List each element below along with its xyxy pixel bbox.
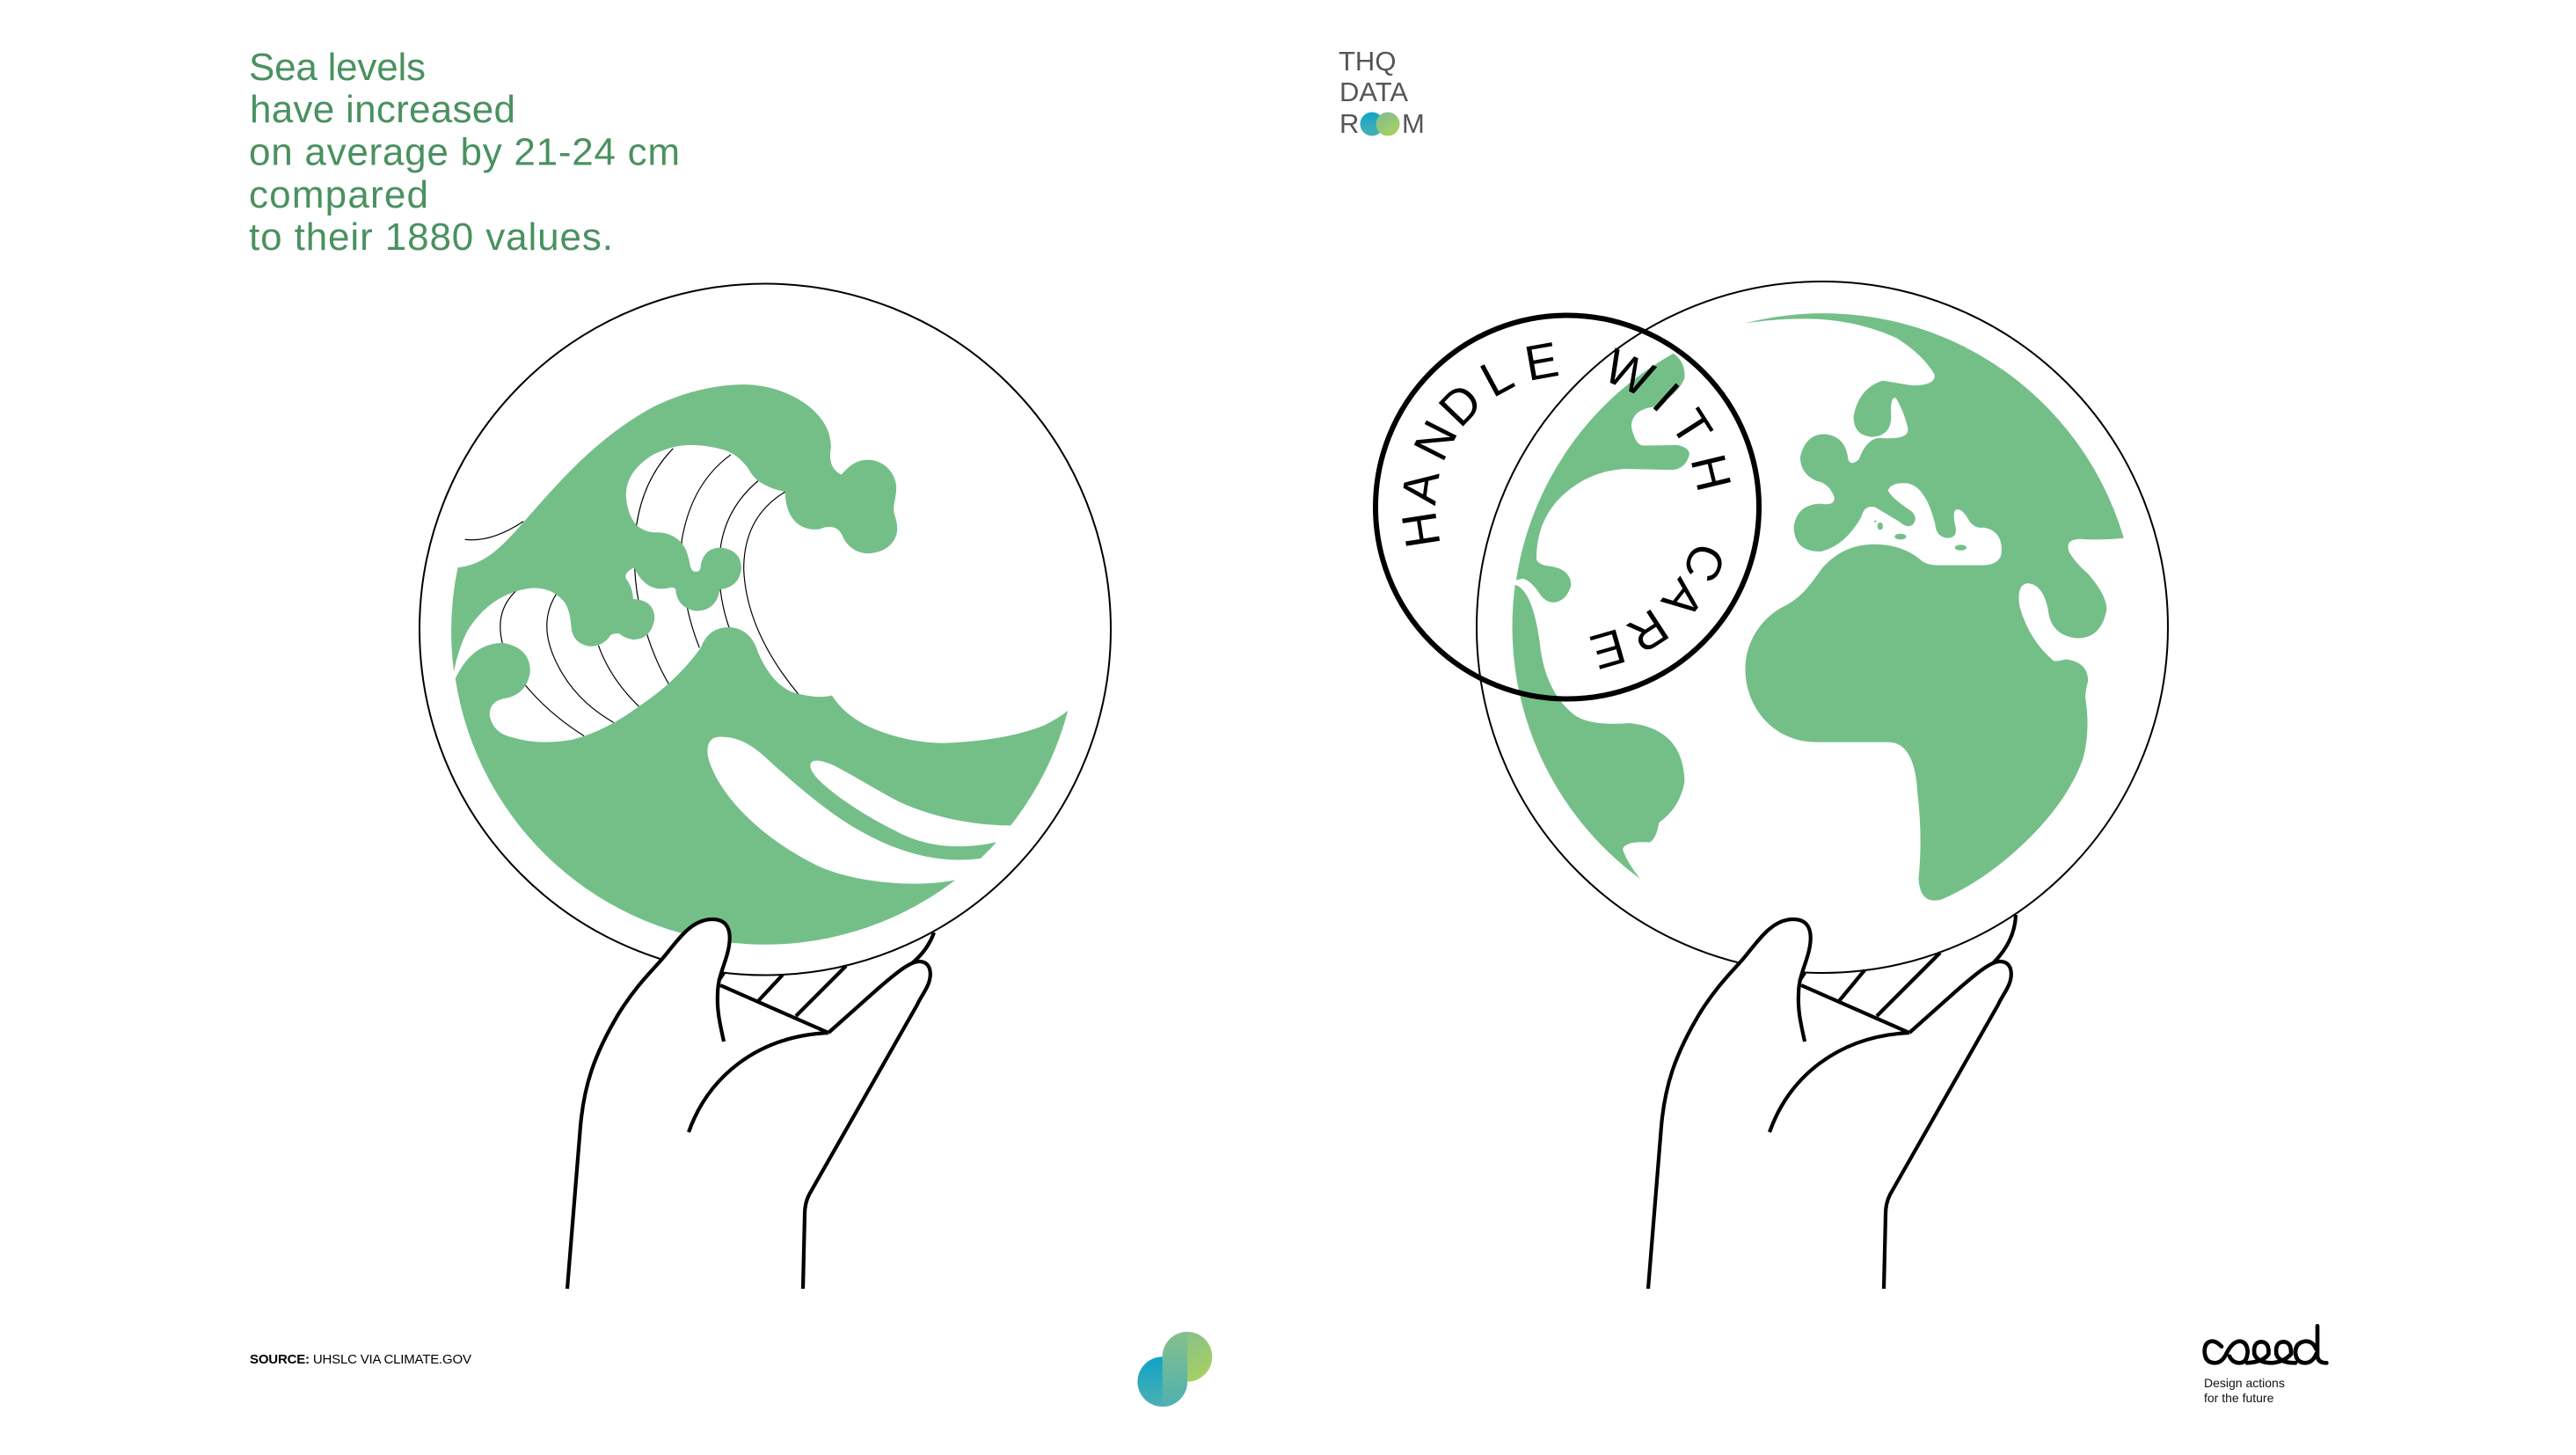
center logo mark bbox=[1137, 1332, 1212, 1407]
stamp curved text: HANDLE WITH CARE bbox=[1390, 325, 1742, 681]
headline text: Sea levels bbox=[249, 46, 426, 89]
wave crest shape bbox=[451, 384, 897, 671]
wave illustration bbox=[451, 384, 1068, 945]
THQ Data Room logo: THQ bbox=[1339, 46, 1396, 77]
coseed tagline bbox=[2204, 1376, 2285, 1405]
South America bbox=[1513, 585, 1684, 879]
North America bbox=[1516, 354, 1689, 603]
headline text bbox=[249, 46, 680, 259]
upper foam highlight bbox=[810, 761, 1025, 846]
source note: SOURCE: UHSLC VIA CLIMATE.GOV bbox=[250, 1352, 471, 1367]
THQ Data Room logo: DATA bbox=[1339, 77, 1408, 107]
continents bbox=[1513, 313, 2124, 901]
wave globe bbox=[420, 283, 1111, 975]
earth globe bbox=[1477, 281, 2168, 973]
wave globe outline bbox=[420, 283, 1111, 975]
Mediterranean islands bbox=[1874, 521, 1967, 551]
earth globe outline bbox=[1477, 281, 2168, 973]
THQ Data Room logo: ROOM bbox=[1339, 108, 1425, 139]
coseed tagline: Design actions bbox=[2204, 1376, 2285, 1390]
headline text: to their 1880 values. bbox=[249, 216, 613, 259]
headline text: on average by 21-24 cm bbox=[249, 130, 680, 174]
Eurasia and Africa bbox=[1744, 313, 2124, 901]
coseed logo bbox=[2204, 1326, 2326, 1405]
wave body shape bbox=[456, 627, 1068, 945]
headline text: have increased bbox=[250, 88, 515, 131]
coseed wordmark bbox=[2205, 1326, 2326, 1363]
handle with care stamp bbox=[1376, 315, 1759, 698]
lower foam highlight bbox=[707, 737, 992, 884]
THQ Data Room logo bbox=[1339, 46, 1425, 139]
right hand holding earth globe bbox=[1648, 915, 2016, 1289]
coseed tagline: for the future bbox=[2204, 1391, 2274, 1405]
headline text: compared bbox=[249, 173, 428, 216]
left hand holding wave globe bbox=[567, 919, 934, 1289]
wave contour lines bbox=[465, 449, 799, 736]
stamp ring bbox=[1376, 315, 1759, 698]
